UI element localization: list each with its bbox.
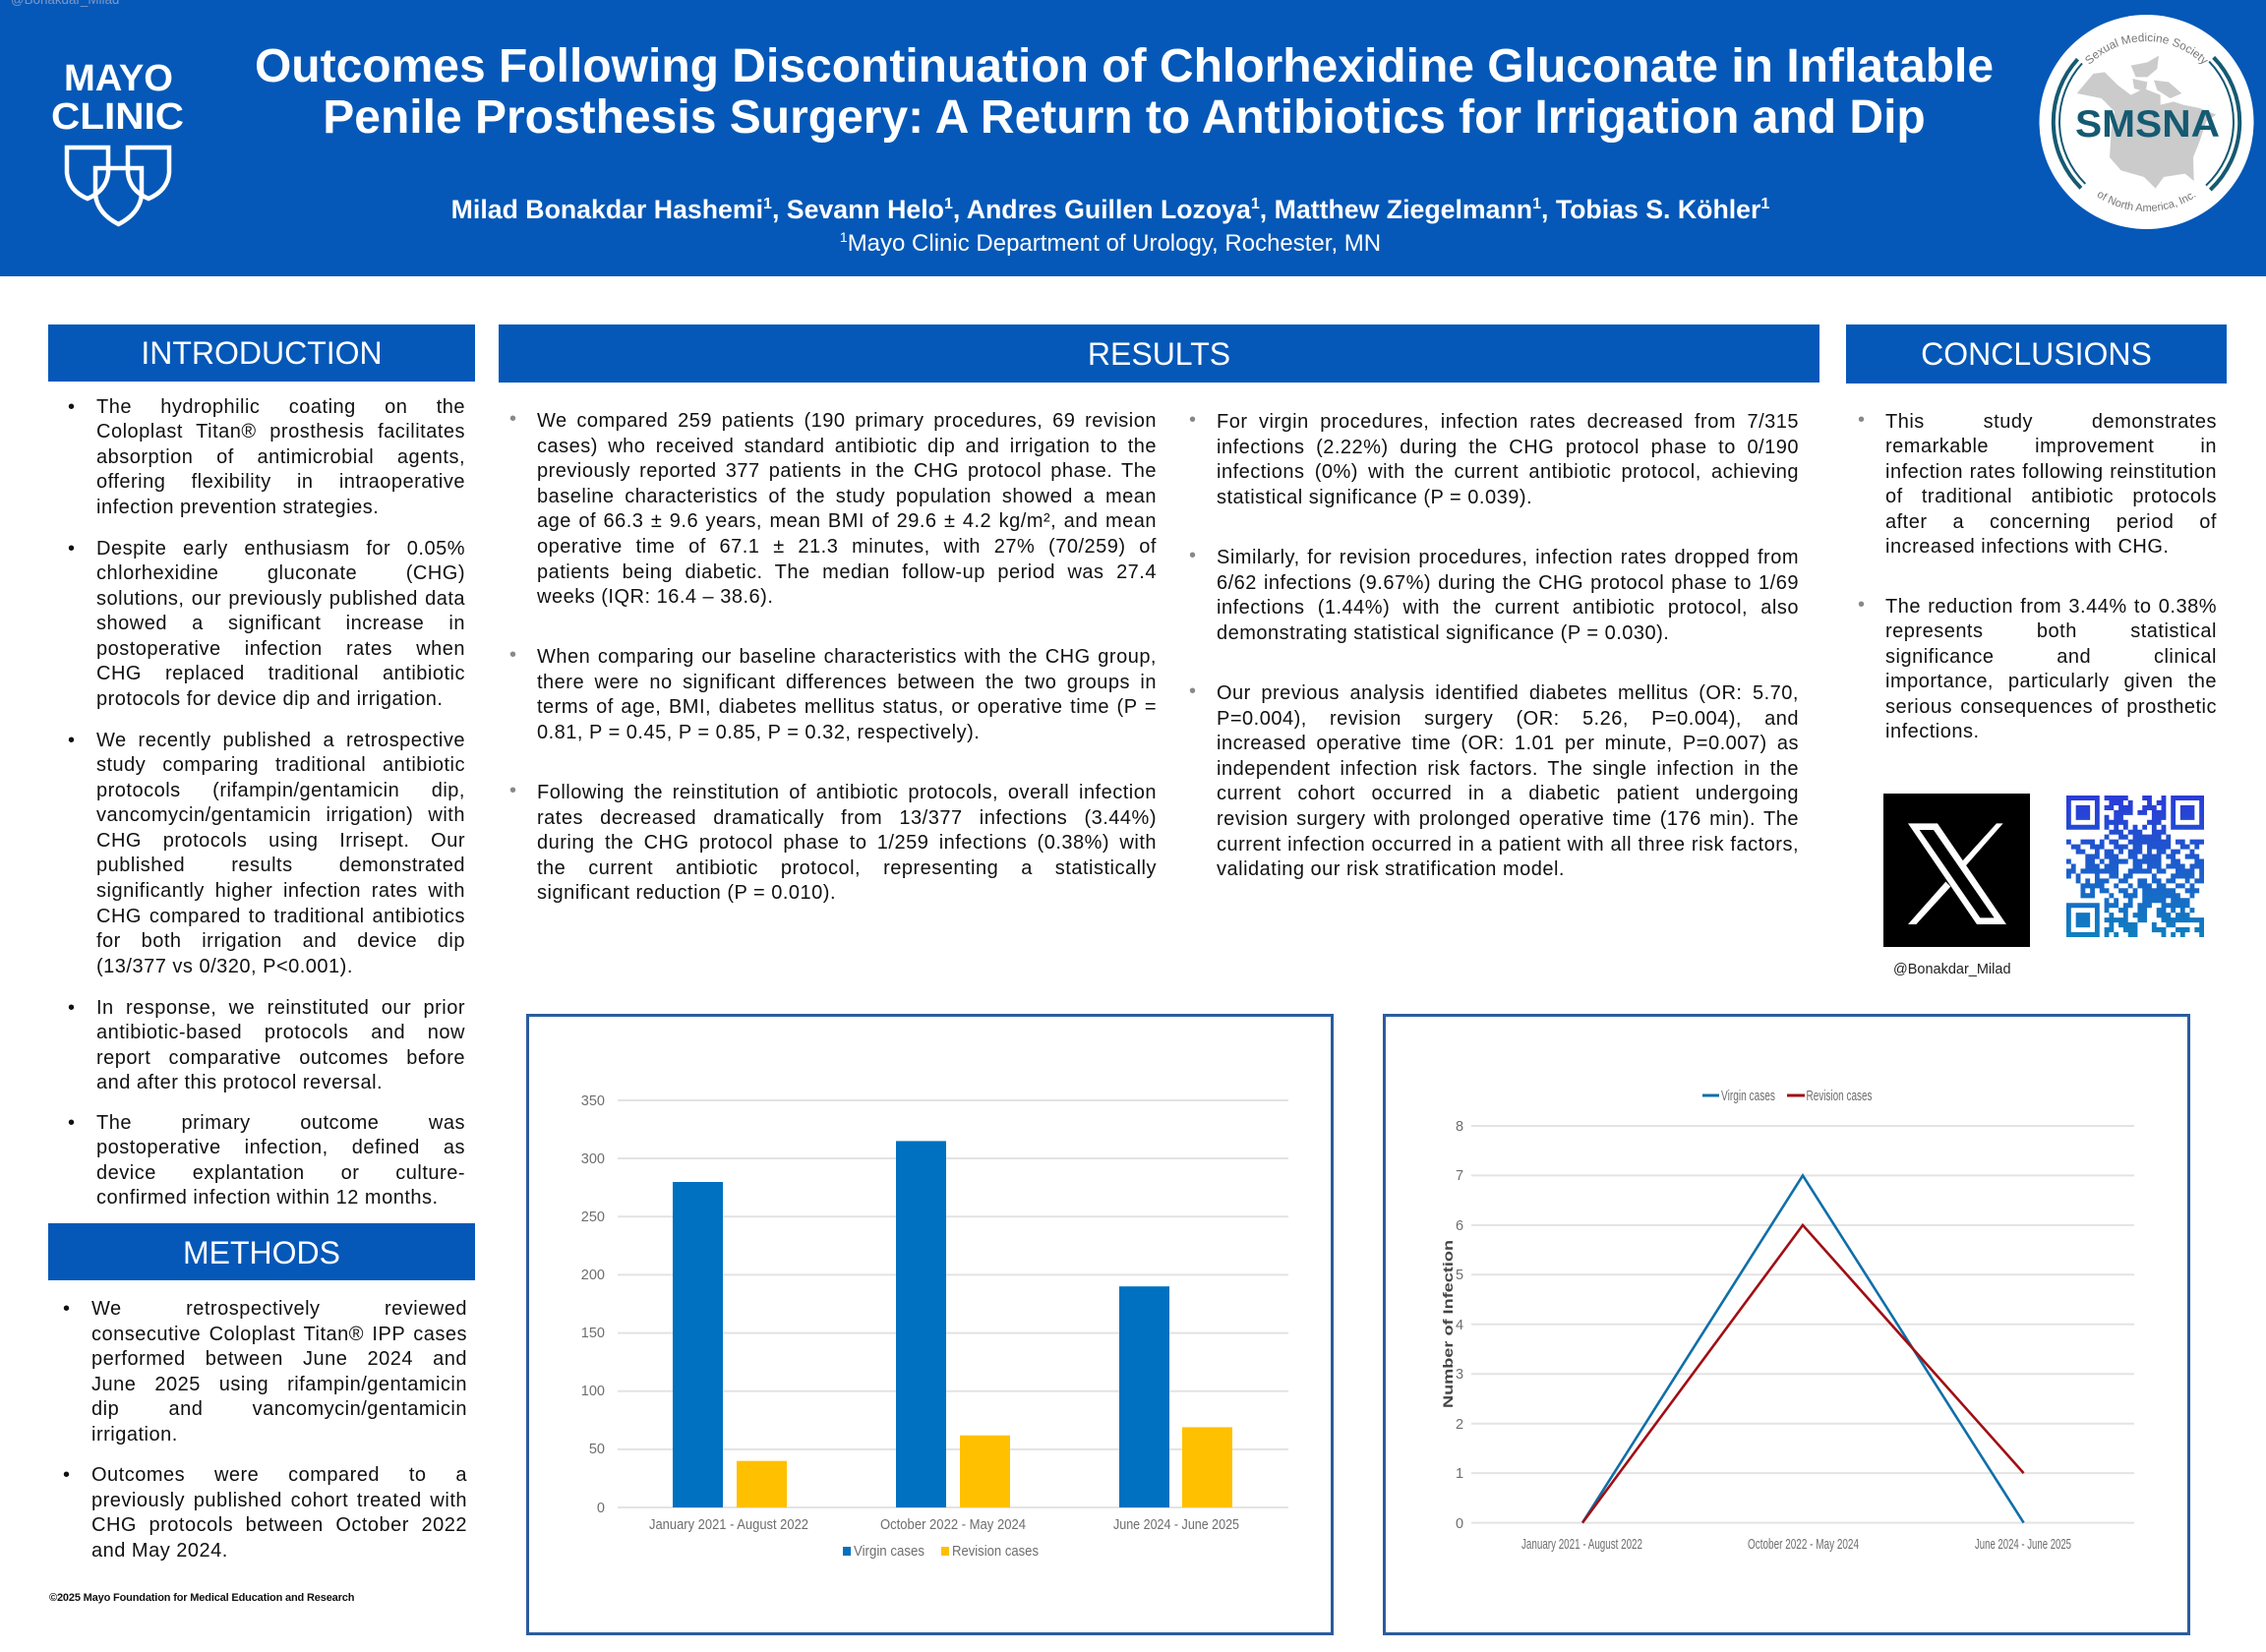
results right bullet 3: validating our risk stratification model. — [1217, 858, 1565, 880]
results right bullet 2: 6/62 infections (9.67%) during the CHG protocol phase to 1/69 — [1217, 572, 1799, 594]
title: Penile Prosthesis Surgery: A Return to Antibiotics for Irrigation and Dip — [323, 91, 1926, 144]
intro bullet 3: CHG compared to traditional antibiotics — [96, 906, 465, 927]
x axis labels: January 2021 - August 2022 — [1521, 1537, 1642, 1553]
y axis labels — [1456, 1119, 1463, 1532]
intro bullet 4: In response, we reinstituted our prior — [96, 997, 465, 1019]
intro bullet 4 — [68, 997, 465, 1093]
intro bullet 2: showed a significant increase in — [96, 613, 465, 634]
legend: Virgin cases — [1721, 1089, 1775, 1104]
y axis labels: 50 — [589, 1442, 605, 1457]
results left bullet 3: rates decreased dramatically from 13/377 infections (3.44%) — [537, 807, 1157, 829]
methods bullet 1 — [63, 1298, 467, 1446]
y axis labels: 8 — [1456, 1119, 1463, 1135]
results left bullet 1: weeks (IQR: 16.4 – 38.6). — [537, 586, 773, 608]
y axis labels: 1 — [1456, 1466, 1463, 1482]
icon: SMSNA society seal — [2040, 15, 2254, 229]
results left bullet 2: When comparing our baseline characteristics with the CHG group, — [537, 646, 1157, 668]
conclusions bullet 1: remarkable improvement in — [1885, 436, 2217, 457]
legend — [843, 1544, 1039, 1560]
heading: results — [499, 324, 1819, 383]
y axis labels: 0 — [1456, 1516, 1463, 1532]
results left bullet 3 — [509, 780, 1157, 904]
results left bullet 1: age of 66.3 ± 9.6 years, mean BMI of 29.6 ± 4.2 kg/m², and mean — [537, 510, 1157, 532]
x axis labels: June 2024 - June 2025 — [1113, 1517, 1239, 1533]
conclusions bullet 2: significance and clinical — [1885, 646, 2217, 668]
results left bullet 2 — [509, 644, 1157, 743]
y axis labels: 7 — [1456, 1168, 1463, 1184]
intro bullet 3: We recently published a retrospective — [96, 730, 465, 751]
intro bullet 2 — [68, 537, 465, 710]
methods bullet 2: and May 2024. — [91, 1540, 228, 1562]
heading: results: RESULTS — [1088, 336, 1230, 372]
methods bullet 1: June 2025 using rifampin/gentamicin — [91, 1374, 467, 1395]
text: • — [1858, 594, 1866, 616]
intro bullet 3: for both irrigation and device dip — [96, 930, 465, 952]
legend — [1702, 1089, 1873, 1104]
results left bullet 1: previously reported 377 patients in the CHG protocol phase. The — [537, 460, 1157, 482]
methods bullet 1: We retrospectively reviewed — [91, 1298, 467, 1320]
x axis labels — [1521, 1537, 2071, 1553]
intro bullet 2: protocols for device dip and irrigation. — [96, 688, 443, 710]
methods bullet 1: irrigation. — [91, 1424, 178, 1446]
intro bullet 5: postoperative infection, defined as — [96, 1137, 465, 1158]
x axis labels: October 2022 - May 2024 — [1748, 1537, 1859, 1553]
conclusions bullet 2: The reduction from 3.44% to 0.38% — [1885, 596, 2217, 618]
intro bullet 5: confirmed infection within 12 months. — [96, 1187, 439, 1209]
x axis labels: June 2024 - June 2025 — [1975, 1537, 2071, 1553]
revision cases line — [1582, 1225, 2024, 1523]
results right bullet 1: infections (2.22%) during the CHG protocol phase to 0/190 — [1217, 437, 1799, 458]
x axis labels: October 2022 - May 2024 — [880, 1517, 1026, 1533]
results right bullet 2 — [1189, 545, 1799, 644]
results right bullet 3: independent infection risk factors. The single infection in the — [1217, 758, 1799, 780]
conclusions bullet 2: represents both statistical — [1885, 620, 2217, 642]
results left bullet 2: there were no significant differences between the two groups in — [537, 672, 1157, 693]
intro bullet 4: antibiotic-based protocols and now — [96, 1022, 465, 1043]
results right bullet 2: infections (1.44%) with the current antibiotic protocol, also — [1217, 597, 1799, 619]
legend: Revision cases — [952, 1544, 1039, 1560]
conclusions bullet 2: importance, particularly given the — [1885, 671, 2217, 692]
methods bullet 1: consecutive Coloplast Titan® IPP cases — [91, 1324, 467, 1345]
y axis labels: 300 — [581, 1151, 605, 1167]
text: • — [509, 780, 517, 801]
revision case bars — [737, 1427, 1232, 1507]
results right bullet 3 — [1189, 680, 1799, 880]
intro bullet 3: significantly higher infection rates with — [96, 880, 465, 902]
methods bullet 2: CHG protocols between October 2022 — [91, 1514, 467, 1536]
map of North America — [2077, 56, 2216, 189]
intro bullet 5 — [68, 1111, 465, 1209]
intro bullet 1: absorption of antimicrobial agents, — [96, 446, 465, 468]
y axis labels: 150 — [581, 1326, 605, 1341]
heading: introduction — [48, 324, 475, 382]
intro bullet 2: CHG replaced traditional antibiotic — [96, 663, 465, 684]
icon: QR code — [2066, 796, 2204, 937]
y axis labels: 100 — [581, 1384, 605, 1399]
results right bullet 3: increased operative time (OR: 1.01 per minute, P=0.007) as — [1217, 733, 1799, 754]
results left bullet 3: during the CHG protocol phase to 1/259 infections (0.38%) with — [537, 832, 1157, 854]
intro bullet 3: vancomycin/gentamicin irrigation) with — [96, 804, 465, 826]
heading: methods — [48, 1223, 475, 1280]
results right bullet 2: Similarly, for revision procedures, infection rates dropped from — [1217, 547, 1799, 568]
conclusions bullet 1: This study demonstrates — [1885, 411, 2217, 433]
y axis labels: 5 — [1456, 1268, 1463, 1283]
X handle label: @Bonakdar_Milad — [1893, 962, 2011, 977]
methods bullet 1: dip and vancomycin/gentamicin — [91, 1398, 467, 1420]
conclusions bullet 2: serious consequences of prosthetic — [1885, 696, 2217, 718]
text: • — [509, 408, 517, 430]
intro bullet 3 — [68, 730, 465, 977]
results right bullet 1: infections (0%) with the current antibiotic protocol, achieving — [1217, 461, 1799, 483]
text: • — [68, 730, 76, 751]
text: • — [1189, 680, 1197, 702]
results right bullet 1 — [1189, 409, 1799, 508]
results left bullet 1 — [509, 408, 1157, 608]
intro bullet 1: Coloplast Titan® prosthesis facilitates — [96, 421, 465, 442]
icon: Mayo Clinic logo — [51, 58, 184, 226]
intro bullet 5: device explantation or culture- — [96, 1162, 465, 1184]
text: • — [1189, 545, 1197, 566]
copyright footer: ©2025 Mayo Foundation for Medical Education and Research — [49, 1592, 354, 1604]
header banner — [0, 0, 2266, 276]
legend: Virgin cases — [854, 1544, 924, 1560]
line chart: infections by period — [1383, 1014, 2190, 1635]
methods bullet 2 — [63, 1464, 467, 1562]
conclusions bullet 2: infections. — [1885, 721, 1980, 742]
intro bullet 1 — [68, 395, 465, 518]
results right bullet 3: revision surgery with prolonged operative time (176 min). The — [1217, 808, 1799, 830]
results right bullet 1: statistical significance (P = 0.039). — [1217, 487, 1532, 508]
conclusions bullet 1: infection rates following reinstitution — [1885, 461, 2217, 483]
virgin cases line — [1582, 1175, 2024, 1523]
results right bullet 3: Our previous analysis identified diabetes mellitus (OR: 5.70, — [1217, 682, 1799, 704]
results left bullet 1: patients being diabetic. The median follow-up period was 27.4 — [537, 561, 1157, 583]
icon: SMSNA society seal: SMSNA — [2075, 103, 2220, 146]
results right bullet 3: P=0.004), revision surgery (OR: 5.26, P=0.004), and — [1217, 708, 1799, 730]
results right bullet 1: For virgin procedures, infection rates decreased from 7/315 — [1217, 411, 1799, 433]
intro bullet 2: chlorhexidine gluconate (CHG) — [96, 562, 465, 584]
y axis labels: 350 — [581, 1093, 605, 1109]
text: • — [63, 1464, 71, 1486]
bar chart: cases by period — [526, 1014, 1334, 1635]
y axis labels: 4 — [1456, 1318, 1463, 1333]
conclusions bullet 1: of traditional antibiotic protocols — [1885, 486, 2217, 507]
icon: Mayo Clinic logo: MAYO — [64, 58, 173, 99]
y axis labels: 6 — [1456, 1218, 1463, 1234]
icon: SMSNA society seal: Sexual Medicine Society — [2085, 33, 2208, 65]
intro bullet 3: study comparing traditional antibiotic — [96, 754, 465, 776]
text: • — [509, 644, 517, 666]
text: • — [1189, 409, 1197, 431]
intro bullet 3: published results demonstrated — [96, 855, 465, 876]
results left bullet 1: We compared 259 patients (190 primary procedures, 69 revision — [537, 410, 1157, 432]
y axis labels: 0 — [597, 1501, 605, 1516]
results left bullet 1: baseline characteristics of the study population showed a mean — [537, 486, 1157, 507]
intro bullet 2: postoperative infection rates when — [96, 638, 465, 660]
intro bullet 4: and after this protocol reversal. — [96, 1072, 383, 1093]
x axis labels: January 2021 - August 2022 — [649, 1517, 808, 1533]
results left bullet 2: terms of age, BMI, diabetes mellitus status, or operative time (P = — [537, 696, 1157, 718]
y axis title: Number of Infection — [1441, 1240, 1456, 1408]
intro bullet 2: solutions, our previously published data — [96, 588, 465, 610]
y axis labels: 3 — [1456, 1367, 1463, 1383]
text: • — [63, 1298, 71, 1320]
text: • — [68, 395, 76, 417]
intro bullet 3: protocols (rifampin/gentamicin dip, — [96, 780, 465, 801]
icon: Mayo Clinic logo: CLINIC — [51, 96, 184, 138]
methods bullet 1: performed between June 2024 and — [91, 1348, 467, 1370]
results left bullet 1: cases) who received standard antibiotic dip and irrigation to the — [537, 436, 1157, 457]
intro bullet 3: CHG protocols using Irrisept. Our — [96, 830, 465, 852]
y axis labels — [581, 1093, 605, 1516]
heading: conclusions — [1846, 324, 2227, 384]
results right bullet 3: current cohort occurred in a diabetic patient undergoing — [1217, 783, 1799, 804]
intro bullet 1: The hydrophilic coating on the — [96, 395, 465, 417]
title: Outcomes Following Discontinuation of Chlorhexidine Gluconate in Inflatable — [255, 40, 1994, 92]
legend: Revision cases — [1806, 1089, 1873, 1104]
conclusions bullet 2 — [1858, 594, 2217, 742]
heading: conclusions: CONCLUSIONS — [1921, 336, 2152, 372]
y axis labels: 250 — [581, 1210, 605, 1225]
conclusions bullet 1: after a concerning period of — [1885, 511, 2217, 533]
text: • — [68, 537, 76, 559]
text: • — [68, 1111, 76, 1133]
y axis labels: 2 — [1456, 1417, 1463, 1433]
intro bullet 3: (13/377 vs 0/320, P<0.001). — [96, 956, 353, 977]
methods bullet 2: Outcomes were compared to a — [91, 1464, 467, 1486]
conclusions bullet 1: increased infections with CHG. — [1885, 536, 2169, 558]
authors: Milad Bonakdar Hashemi1, Sevann Helo1, Andres Guillen Lozoya1, Matthew Ziegelmann1, Tobias S. Köhler1 — [451, 195, 1769, 224]
methods bullet 2: previously published cohort treated with — [91, 1490, 467, 1511]
results left bullet 1: operative time of 67.1 ± 21.3 minutes, with 27% (70/259) of — [537, 536, 1157, 558]
intro bullet 1: offering flexibility in intraoperative — [96, 471, 465, 493]
results right bullet 3: current infection occurred in a patient with all three risk factors, — [1217, 834, 1799, 856]
text: • — [68, 997, 76, 1019]
x axis labels — [649, 1517, 1239, 1533]
conclusions bullet 1 — [1858, 409, 2217, 558]
results left bullet 3: Following the reinstitution of antibiotic protocols, overall infection — [537, 782, 1157, 803]
virgin case bars — [673, 1141, 1169, 1507]
results left bullet 2: 0.81, P = 0.45, P = 0.85, P = 0.32, respectively). — [537, 722, 980, 743]
icon: X logo — [1883, 794, 2030, 947]
intro bullet 5: The primary outcome was — [96, 1111, 465, 1133]
y axis labels: 200 — [581, 1268, 605, 1283]
results left bullet 3: the current antibiotic protocol, representing a statistically — [537, 857, 1157, 879]
title — [255, 40, 1994, 144]
affiliation: 1Mayo Clinic Department of Urology, Rochester, MN — [840, 228, 1381, 256]
results right bullet 2: demonstrating statistical significance (P = 0.030). — [1217, 622, 1669, 644]
results left bullet 3: significant reduction (P = 0.010). — [537, 882, 836, 904]
intro bullet 4: report comparative outcomes before — [96, 1047, 465, 1069]
heading: introduction: INTRODUCTION — [141, 335, 383, 371]
intro bullet 2: Despite early enthusiasm for 0.05% — [96, 537, 465, 559]
heading: methods: METHODS — [183, 1235, 340, 1270]
icon: SMSNA society seal: of North America, Inc. — [2097, 192, 2195, 211]
intro bullet 1: infection prevention strategies. — [96, 497, 379, 518]
text: • — [1858, 409, 1866, 431]
